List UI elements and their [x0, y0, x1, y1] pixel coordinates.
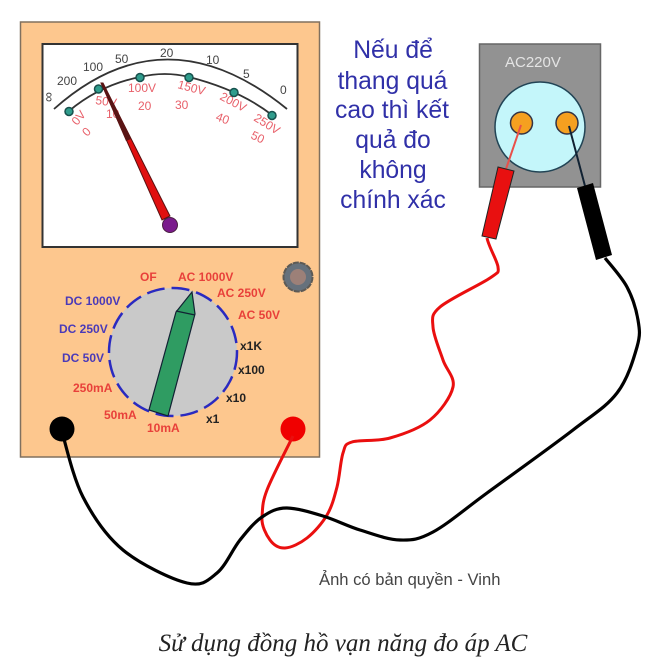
dial labels: blue: DC 1000V — [65, 294, 120, 308]
dial labels: black: x1 — [206, 412, 220, 426]
callout text: không — [359, 157, 427, 184]
socket label: AC220V — [505, 54, 561, 71]
callout text — [335, 37, 449, 214]
upper scale numbers: 0 — [280, 83, 287, 97]
dial labels: red — [73, 270, 280, 435]
icon: adjustment knob — [284, 262, 312, 292]
black jack — [50, 416, 74, 442]
rotary selector dial — [109, 288, 237, 416]
needle pivot — [162, 218, 178, 232]
dial labels: red: OF — [140, 270, 157, 284]
red jack — [280, 416, 306, 442]
upper scale numbers: ∞ — [40, 92, 56, 102]
callout text: thang quá — [338, 68, 448, 95]
red probe — [482, 125, 521, 239]
dial labels: red: AC 50V — [238, 308, 280, 322]
lower scale labels — [69, 77, 283, 146]
dial labels: red: AC 1000V — [178, 270, 233, 284]
upper scale numbers: 200 — [57, 74, 77, 88]
lower scale labels: 50 — [249, 128, 267, 146]
callout text: chính xác — [340, 187, 446, 214]
lower scale labels: 10 — [106, 107, 120, 121]
dial labels: red: 50mA — [104, 408, 137, 422]
callout text: quả đo — [355, 127, 431, 154]
dial labels: red: 10mA — [147, 421, 180, 435]
dial labels: black: x10 — [226, 391, 246, 405]
upper scale numbers — [40, 46, 287, 102]
selector pointer — [149, 292, 195, 416]
socket face — [495, 82, 585, 172]
lower scale labels: 50V — [95, 93, 118, 110]
upper scale numbers: 50 — [115, 52, 129, 66]
lower scale labels: 0V — [69, 108, 89, 128]
caption: Sử dụng đồng hồ vạn năng đo áp AC — [159, 630, 528, 657]
black probe — [569, 126, 612, 260]
lower scale labels: 150V — [176, 77, 207, 98]
right hole — [556, 112, 578, 134]
lower scale labels: 250V — [251, 111, 283, 137]
dial labels: blue — [59, 294, 120, 365]
lower scale labels: 100V — [128, 81, 156, 95]
dial labels: black: x1K — [240, 339, 262, 353]
lower scale labels: 0 — [79, 124, 94, 139]
red wire — [262, 238, 498, 548]
lower scale labels: 30 — [175, 98, 189, 112]
dial labels: black — [206, 339, 265, 426]
dial labels: blue: DC 50V — [62, 351, 104, 365]
upper scale numbers: 20 — [160, 46, 174, 60]
upper scale numbers: 100 — [83, 60, 103, 74]
panel: AC220V socket — [480, 44, 600, 187]
dial labels: red: 250mA — [73, 381, 113, 395]
lower scale labels: 20 — [138, 99, 152, 113]
panel: multimeter — [20, 22, 320, 457]
callout text: Nếu để — [353, 37, 433, 64]
needle — [101, 83, 170, 220]
panel: meter display — [40, 44, 298, 247]
lower scale labels: 40 — [214, 110, 232, 127]
lower scale labels: 200V — [218, 89, 249, 115]
photo credit: Ảnh có bản quyền - Vinh — [319, 570, 500, 589]
upper scale numbers: 10 — [206, 53, 220, 67]
dial labels: blue: DC 250V — [59, 322, 108, 336]
scale arcs — [54, 60, 287, 115]
scale dots — [65, 74, 276, 120]
dial labels: red: AC 250V — [217, 286, 266, 300]
upper scale numbers: 5 — [243, 67, 250, 81]
black wire — [62, 258, 639, 584]
callout text: cao thì kết — [335, 97, 449, 124]
dial labels: black: x100 — [238, 363, 265, 377]
left hole — [510, 112, 532, 134]
